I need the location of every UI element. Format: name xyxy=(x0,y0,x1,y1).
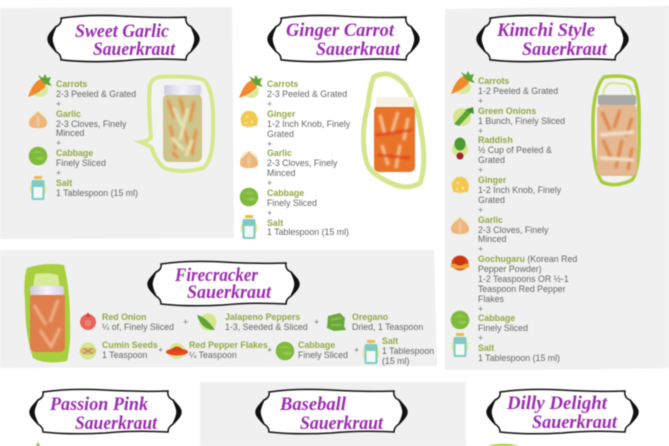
ingredient: cabbage: Finely Sliced xyxy=(298,350,348,360)
ingredient list: 1-2 Inch Knob, Finely xyxy=(267,119,351,129)
ingredient list: Grated xyxy=(478,155,505,165)
ingredient list: Carrots xyxy=(56,79,87,89)
icon: garlic xyxy=(240,151,258,169)
heading banner: firecracker: Firecracker xyxy=(174,266,259,286)
heading banner: kimchi style: Sauerkraut xyxy=(522,40,608,60)
ingredient list: Carrots xyxy=(478,76,509,86)
icon: garlic xyxy=(29,111,47,129)
ingredient list: Finely Sliced xyxy=(478,323,528,333)
ingredient list xyxy=(267,79,351,237)
jar photo with green outline xyxy=(363,74,424,187)
heading banner: sweet garlic xyxy=(48,15,199,62)
ingredient list: 2-3 Peeled & Grated xyxy=(267,89,347,99)
heading banner: passion pink: Sauerkraut xyxy=(75,414,158,434)
icon: salt xyxy=(452,333,468,357)
ingredient: jalapeno peppers: 1-3, Seeded & Sliced xyxy=(225,322,308,332)
plus sign: + xyxy=(267,345,272,355)
heading banner: ginger carrot: Ginger Carrot xyxy=(286,21,395,41)
ingredient: cabbage xyxy=(298,340,348,360)
ingredient list: Finely Sliced xyxy=(56,158,106,168)
ingredient list: Salt xyxy=(267,218,283,228)
ingredient list: Raddish xyxy=(478,135,513,145)
panel: ginger carrot sauerkraut xyxy=(239,15,424,239)
ingredient list: Green Onions xyxy=(478,106,536,116)
heading banner: baseball: Sauerkraut xyxy=(300,414,384,434)
heading banner: kimchi style xyxy=(477,15,628,62)
icon: salt xyxy=(30,176,46,200)
ingredient list: + xyxy=(478,96,483,106)
ingredient: cabbage: Cabbage xyxy=(298,340,335,350)
panel: firecracker sauerkraut xyxy=(24,261,434,366)
ingredient: salt: Salt xyxy=(382,336,398,346)
icon: green onions xyxy=(453,107,474,126)
ingredient list: Flakes xyxy=(478,294,505,304)
ingredient list: 2-3 Peeled & Grated xyxy=(56,89,136,99)
plus sign: + xyxy=(314,317,319,327)
ingredient: red onion: ¼ of, Finely Sliced xyxy=(102,322,174,332)
icon: salt xyxy=(362,340,380,364)
ingredient list: 1-2 Inch Knob, Finely xyxy=(478,185,562,195)
ingredient list: + xyxy=(478,205,483,215)
ingredient list: + xyxy=(478,126,483,136)
ingredient list: Salt xyxy=(478,343,494,353)
ingredient list: + xyxy=(267,99,272,109)
ingredient: jalapeno peppers: Jalapeno Peppers xyxy=(225,312,300,322)
ingredient list: Ginger xyxy=(267,109,296,119)
ingredient list: 1 Tablespoon (15 ml) xyxy=(478,353,560,363)
ingredient list: Gochugaru (Korean Red xyxy=(478,254,577,264)
heading banner: sweet garlic: Sauerkraut xyxy=(93,40,176,60)
panel: kimchi style background xyxy=(445,6,669,370)
ingredient list: 2-3 Cloves, Finely xyxy=(478,225,549,235)
icon: carrot xyxy=(28,74,52,97)
plus sign: + xyxy=(183,317,188,327)
ingredient list: Garlic xyxy=(267,148,292,158)
plus sign: + xyxy=(158,345,163,355)
ingredient list: + xyxy=(56,99,61,109)
ingredient list: Garlic xyxy=(478,215,503,225)
panel: sweet garlic background xyxy=(0,7,234,239)
icon: carrot xyxy=(239,75,263,98)
icon: cabbage xyxy=(276,342,294,360)
ingredient: red onion: Red Onion xyxy=(102,312,146,322)
heading banner: dilly delight xyxy=(487,389,638,434)
ingredient list: Cabbage xyxy=(56,148,93,158)
ingredient list: 1-2 Teaspoons OR ½-1 xyxy=(478,274,569,284)
jar photo with green outline xyxy=(141,76,213,171)
icon: radish xyxy=(452,138,468,160)
ingredient list: 1-2 Peeled & Grated xyxy=(478,86,558,96)
ingredient: oregano xyxy=(352,312,423,332)
icon: salt xyxy=(240,215,258,239)
ingredient: cumin seeds: 1 Teaspoon xyxy=(102,350,147,360)
panel: sweet garlic sauerkraut xyxy=(28,15,213,200)
ingredient list: 2-3 Cloves, Finely xyxy=(267,158,338,168)
ingredient list: + xyxy=(267,178,272,188)
panel: baseball background xyxy=(200,382,466,446)
icon: cabbage xyxy=(240,188,258,206)
ingredient list: Teaspoon Red Pepper xyxy=(478,284,566,294)
ingredient list: + xyxy=(478,333,483,343)
ingredient list: ½ Cup of Peeled & xyxy=(478,145,552,155)
icon: cabbage xyxy=(29,147,47,165)
icon: cumin seeds xyxy=(80,342,96,360)
ingredient list: + xyxy=(56,138,61,148)
ingredient: oregano: Dried, 1 Teaspoon xyxy=(352,322,423,332)
heading banner: passion pink xyxy=(30,389,181,434)
ingredient: cumin seeds: Cumin Seeds xyxy=(102,340,158,350)
ingredient list: Salt xyxy=(56,178,72,188)
ingredient list: Grated xyxy=(267,129,294,139)
ingredient list: 1 Bunch, Finely Sliced xyxy=(478,116,565,126)
icon: gochugaru xyxy=(450,256,470,270)
ingredient list: Cabbage xyxy=(478,313,515,323)
ingredient list: Pepper Powder) xyxy=(478,264,542,274)
icon: ginger xyxy=(240,110,258,128)
heading banner: ginger carrot: Sauerkraut xyxy=(316,40,401,60)
ingredient list xyxy=(56,79,138,198)
ingredient list: Minced xyxy=(478,234,506,244)
heading banner: sweet garlic: Sweet Garlic xyxy=(75,22,169,42)
ingredient list: Minced xyxy=(56,128,84,138)
ingredient: jalapeno peppers xyxy=(225,312,308,332)
heading banner: passion pink: Passion Pink xyxy=(49,395,149,415)
ingredient list: + xyxy=(478,165,483,175)
ingredient list xyxy=(478,76,577,363)
ingredient list: Finely Sliced xyxy=(267,198,317,208)
heading banner: kimchi style: Kimchi Style xyxy=(496,21,595,41)
cropped carrot leaf at bottom edge xyxy=(36,442,40,446)
ingredient: oregano: Oregano xyxy=(352,312,389,322)
heading banner: dilly delight: Sauerkraut xyxy=(532,413,618,433)
heading banner: firecracker: Sauerkraut xyxy=(187,283,272,303)
ingredient list: 1 Tablespoon (15 ml) xyxy=(56,188,138,198)
jar photo with green outline xyxy=(593,76,639,185)
icon: garlic xyxy=(451,217,469,235)
icon: jalapeno xyxy=(197,314,216,330)
ingredient list: 1 Tablespoon (15 ml) xyxy=(267,227,349,237)
ingredient: salt: (15 ml) xyxy=(382,356,409,366)
heading banner: baseball xyxy=(256,389,407,434)
heading banner: baseball: Baseball xyxy=(279,395,347,415)
heading banner: firecracker xyxy=(148,261,299,306)
panel: firecracker background xyxy=(0,250,437,368)
ingredient: salt xyxy=(382,336,434,366)
ingredient: red onion xyxy=(102,312,174,332)
jar photo with green backing xyxy=(24,264,70,362)
icon: red pepper flakes xyxy=(166,343,188,359)
ingredient list: Cabbage xyxy=(267,188,304,198)
ingredient list: + xyxy=(267,208,272,218)
ingredient list: Garlic xyxy=(56,109,81,119)
heading banner: ginger carrot xyxy=(268,15,419,62)
icon: red onion xyxy=(80,312,96,330)
ingredient: red pepper flakes: ¼ Teaspoon xyxy=(189,350,237,360)
ingredient list: + xyxy=(478,304,483,314)
ingredient list: + xyxy=(267,139,272,149)
ingredient list: + xyxy=(478,244,483,254)
plus sign: + xyxy=(354,345,359,355)
panel: kimchi style sauerkraut xyxy=(450,15,639,363)
icon: ginger xyxy=(452,176,469,194)
ingredient list: Ginger xyxy=(478,175,507,185)
icon: oregano xyxy=(327,313,346,331)
ingredient: red pepper flakes xyxy=(189,340,268,360)
cropped jar outline at bottom edge xyxy=(488,444,520,446)
ingredient list: + xyxy=(56,168,61,178)
ingredient: salt: 1 Tablespoon xyxy=(382,346,434,356)
ingredient: cumin seeds xyxy=(102,340,158,360)
ingredient: red pepper flakes: Red Pepper Flakes xyxy=(189,340,268,350)
ingredient list: 2-3 Cloves, Finely xyxy=(56,119,127,129)
icon: cabbage xyxy=(451,311,469,329)
ingredient list: Minced xyxy=(267,168,295,178)
heading banner: dilly delight: Dilly Delight xyxy=(506,394,608,414)
icon: carrot xyxy=(451,71,475,94)
ingredient list: Grated xyxy=(478,195,505,205)
ingredient list: Carrots xyxy=(267,79,298,89)
